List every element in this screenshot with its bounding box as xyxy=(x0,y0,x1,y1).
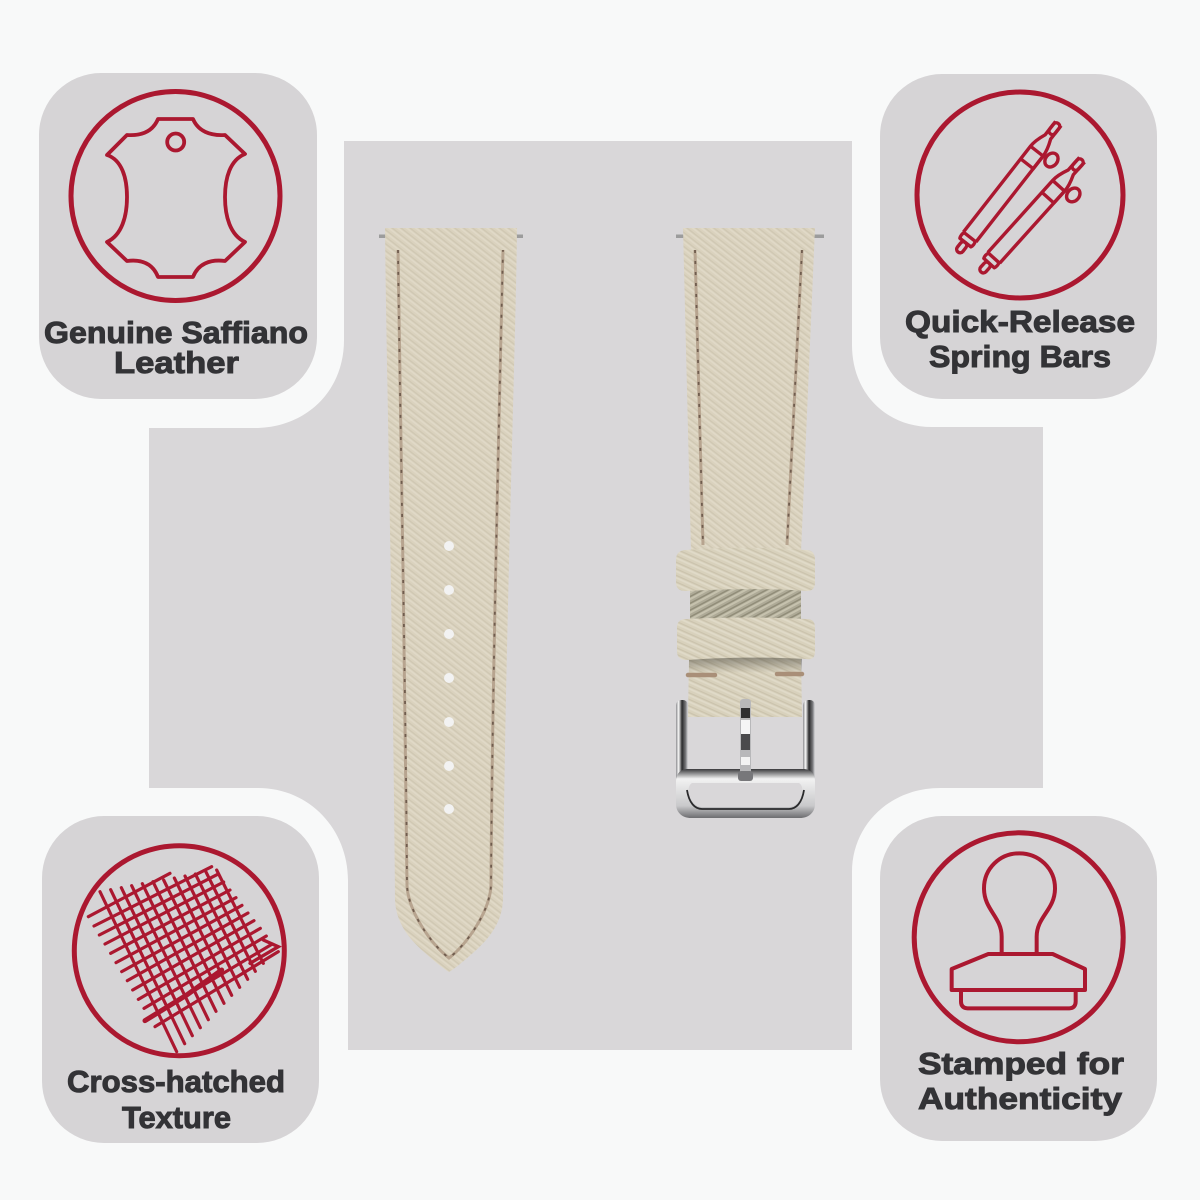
strap holes xyxy=(444,541,454,814)
spring bar one xyxy=(952,119,1076,266)
buckle tongue xyxy=(738,699,753,781)
spring bar tips xyxy=(379,234,523,238)
icon: leather hide xyxy=(71,92,280,300)
panel: quick-release spring bars xyxy=(880,74,1157,399)
heavy hatch stroke xyxy=(145,970,222,1021)
buckle right post xyxy=(803,700,815,782)
card background xyxy=(39,73,317,399)
stitching xyxy=(695,250,802,545)
spring bar tips xyxy=(676,234,824,238)
label: Authenticity xyxy=(918,1081,1123,1116)
lower keeper xyxy=(677,618,815,660)
label: Quick-Release xyxy=(905,304,1135,339)
label: Leather xyxy=(114,345,239,380)
buckle inner reflection xyxy=(687,790,804,809)
icon: stamp xyxy=(914,833,1123,1042)
label xyxy=(918,1046,1124,1116)
label xyxy=(905,304,1135,374)
central grey backdrop panel xyxy=(149,141,1043,1050)
upper keeper xyxy=(676,548,815,591)
icon: cross-hatching xyxy=(74,846,284,1056)
strap body lower xyxy=(688,657,802,717)
label: Spring Bars xyxy=(929,339,1111,374)
watch strap: long piece xyxy=(379,228,523,972)
buckle crossbar and base loop xyxy=(676,769,815,818)
watch strap: buckle piece xyxy=(676,228,824,818)
loose stitch ends xyxy=(688,674,802,675)
shadow under lower keeper xyxy=(689,657,802,673)
dense right edge scribble xyxy=(250,940,278,963)
panel: cross-hatched texture xyxy=(42,816,319,1143)
label: Stamped for xyxy=(918,1046,1124,1081)
spring bar two xyxy=(975,154,1099,287)
card background xyxy=(42,816,319,1143)
panel: stamped for authenticity xyxy=(880,816,1157,1141)
hatch lines falling xyxy=(100,870,263,1052)
strap shadowed section between keepers xyxy=(690,588,801,620)
card background xyxy=(880,74,1157,399)
strap body upper xyxy=(683,228,815,552)
hatch lines rising xyxy=(88,867,278,1027)
card background xyxy=(880,816,1157,1141)
panel: genuine saffiano leather xyxy=(39,73,317,399)
label xyxy=(67,1064,285,1135)
label: Texture xyxy=(122,1100,231,1135)
buckle xyxy=(676,699,815,818)
buckle left post xyxy=(676,700,688,782)
label: Cross-hatched xyxy=(67,1064,285,1099)
icon: spring bars xyxy=(917,92,1123,298)
stitching xyxy=(398,250,503,958)
label xyxy=(44,315,308,380)
strap body xyxy=(385,228,517,972)
label: Genuine Saffiano xyxy=(44,315,308,350)
